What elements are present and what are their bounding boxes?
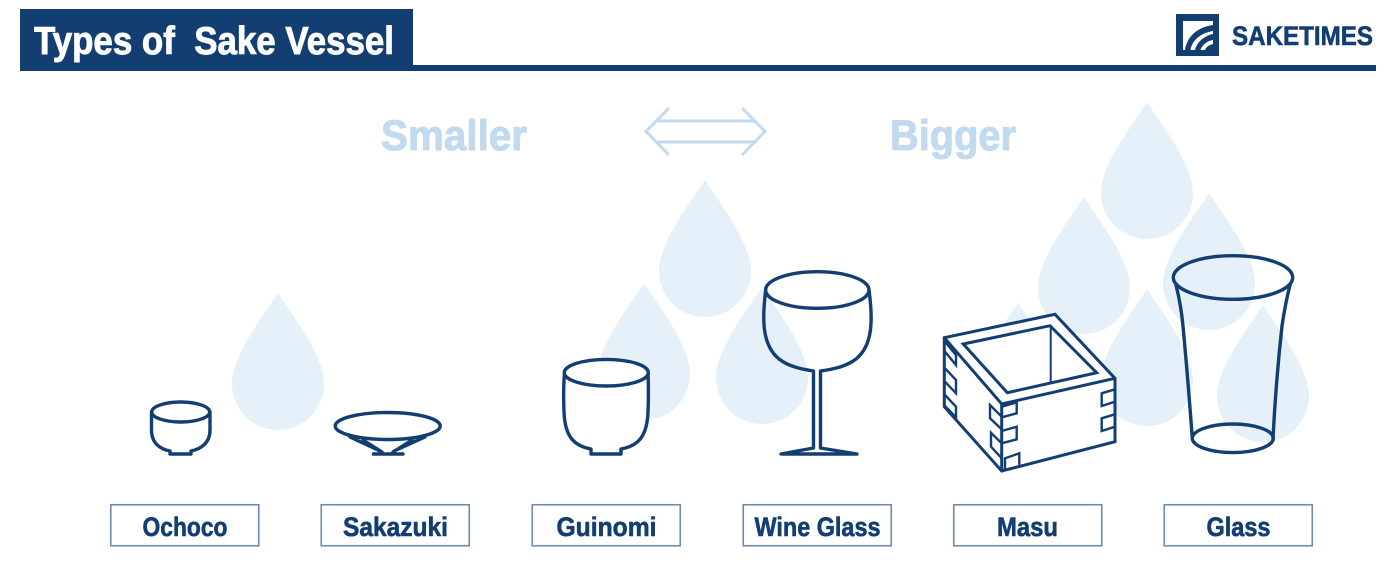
title (20, 9, 413, 71)
logo: SAKETIMES (1176, 14, 1373, 56)
vessel: guinomi (564, 359, 648, 454)
label: Ochoco: Ochoco (142, 512, 228, 542)
label: Glass: Glass (1206, 512, 1270, 542)
heading: Bigger: Bigger (890, 112, 1016, 160)
heading: Smaller: Smaller (381, 112, 527, 160)
logo wordmark: SAKETIMES (1232, 21, 1373, 51)
water drops background (232, 102, 1309, 442)
title: Types of Sake Vessel (34, 20, 394, 63)
label: Ochoco (111, 505, 259, 546)
label: Sakazuki (321, 505, 469, 546)
label: Masu (954, 505, 1102, 546)
icon: logo mark (1176, 14, 1219, 56)
label: Guinomi (532, 505, 680, 546)
label: Guinomi: Guinomi (556, 512, 656, 542)
vessel: masu (944, 314, 1115, 471)
arrow: size scale (646, 108, 765, 155)
vessel: ochoco (152, 402, 210, 454)
vessel: wine glass (764, 272, 871, 454)
label: Sakazuki: Sakazuki (343, 512, 448, 542)
vessel: glass (1173, 256, 1293, 453)
masu joints (945, 342, 1115, 469)
vessel: sakazuki (335, 412, 440, 454)
label: Glass (1164, 505, 1312, 546)
label: Wine Glass: Wine Glass (754, 512, 880, 542)
header rule (20, 65, 1376, 71)
label: Wine Glass (743, 505, 891, 546)
label: Masu: Masu (997, 512, 1058, 542)
